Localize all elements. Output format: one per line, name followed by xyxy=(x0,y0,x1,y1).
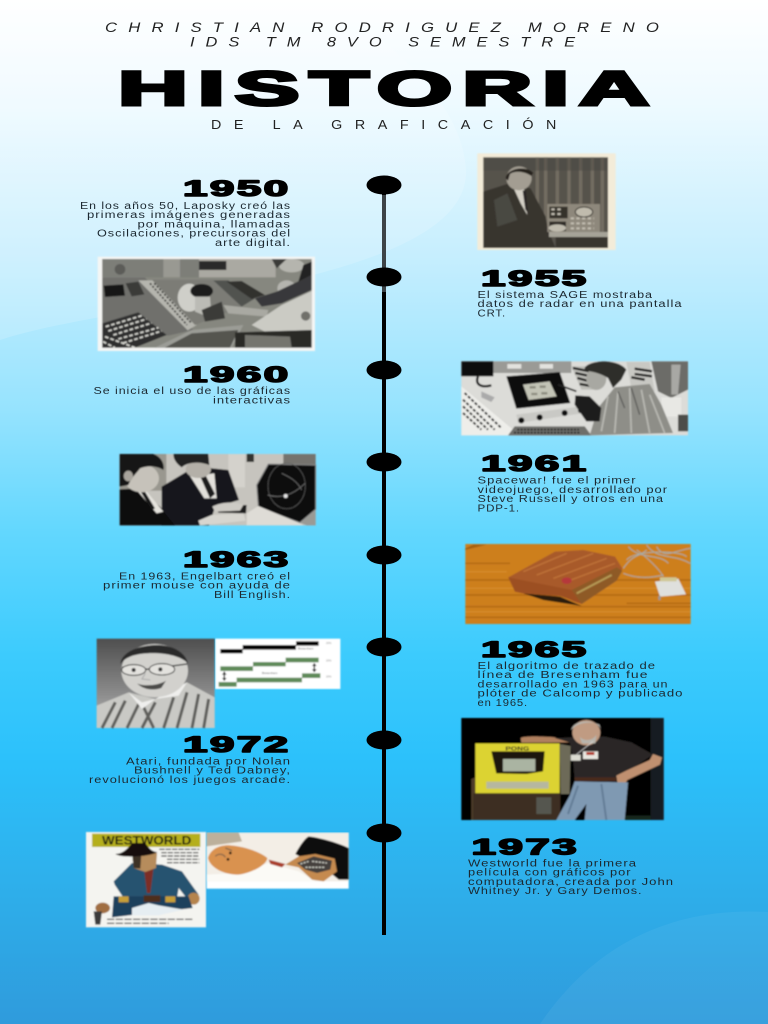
entry: 1972: revolucionó los juegos arcade. xyxy=(89,775,291,786)
entry: 1972 xyxy=(89,732,291,786)
entry: 1963: En 1963, Engelbart creó el xyxy=(119,572,291,582)
subtitle: DE LA GRAFICACIÓN xyxy=(211,117,569,132)
entry: 1973: 1973 xyxy=(472,834,579,860)
entry: 1961: videojuego, desarrollado por xyxy=(478,485,668,496)
entry: 1961: Spacewar! fue el primer xyxy=(478,476,636,486)
entry: 1955 xyxy=(478,266,682,320)
entry: 1963: 1963 xyxy=(183,547,290,572)
author header xyxy=(105,20,670,50)
photo: Sketchpad operator xyxy=(460,360,689,436)
entry: 1965: en 1965. xyxy=(478,698,528,709)
entry: 1950: 1950 xyxy=(183,176,290,201)
chart: Bresenham line steps: 20% xyxy=(326,674,332,678)
entry: 1973: Westworld fue la primera xyxy=(468,858,637,870)
photo: Westworld poster: WESTWORLD xyxy=(102,834,192,848)
background wave: top light shape xyxy=(0,0,466,340)
photo: Westworld android xyxy=(206,832,350,890)
entry: 1960: 1960 xyxy=(183,362,290,387)
entry: 1961 xyxy=(478,451,668,514)
entry: 1973: Whitney Jr. y Gary Demos. xyxy=(468,886,642,897)
chart: Bresenham line steps: Bresenham xyxy=(298,646,314,650)
entry: 1963: Bill English. xyxy=(214,590,291,601)
entry: 1960: Se inicia el uso de las gráficas xyxy=(94,386,291,397)
entry: 1961: 1961 xyxy=(481,451,588,476)
entry: 1955: CRT. xyxy=(478,308,506,320)
entry: 1961: PDP-1. xyxy=(478,504,520,514)
entry: 1950: por máquina, llamadas xyxy=(138,220,291,230)
entry: 1972: 1972 xyxy=(183,732,290,757)
entry: 1961: Steve Russell y otros en una xyxy=(478,494,664,505)
entry: 1950: En los años 50, Laposky creó las xyxy=(80,201,291,212)
author header: IDS TM 8VO SEMESTRE xyxy=(190,34,586,50)
timeline dots xyxy=(366,176,402,842)
entry: 1972: Atari, fundada por Nolan xyxy=(126,756,291,768)
chart: Bresenham line steps: 20% xyxy=(326,641,332,645)
entry: 1950: Oscilaciones, precursoras del xyxy=(97,228,291,240)
photo: Westworld poster xyxy=(85,831,207,928)
background wave: bottom light shape xyxy=(540,911,768,1024)
photo: first mouse xyxy=(464,542,692,626)
entry: 1950: primeras imágenes generadas xyxy=(87,210,291,221)
author header: CHRISTIAN RODRIGUEZ MORENO xyxy=(105,20,670,35)
chart: Bresenham line steps xyxy=(215,638,342,690)
timeline axis xyxy=(366,176,402,935)
entry: 1965: 1965 xyxy=(481,637,588,662)
entry: 1965 xyxy=(478,637,684,709)
title: HISTORIA xyxy=(118,63,659,116)
entry: 1963 xyxy=(103,547,291,601)
entry: 1973: computadora, creada por John xyxy=(468,877,674,888)
photo: Pong cabinet and Bushnell: PONG xyxy=(505,746,529,752)
entry: 1963: primer mouse con ayuda de xyxy=(103,580,291,592)
entry: 1950 xyxy=(80,176,291,249)
entry: 1965: línea de Bresenham fue xyxy=(478,670,648,681)
entry: 1955: 1955 xyxy=(481,266,588,291)
chart: Bresenham line steps: 20% xyxy=(326,658,332,662)
entry: 1973 xyxy=(468,834,674,897)
photo: SAGE console xyxy=(96,256,316,352)
entry: 1965: plóter de Calcomp y publicado xyxy=(478,688,684,700)
entry: 1972: Bushnell y Ted Dabney, xyxy=(134,766,291,776)
photo: Spacewar players xyxy=(118,452,317,527)
entry: 1960: interactivas xyxy=(213,396,291,406)
entry: 1955: datos de radar en una pantalla xyxy=(478,299,682,310)
entry: 1973: película con gráficos por xyxy=(468,868,632,878)
photo: Pong cabinet and Bushnell xyxy=(460,716,665,822)
entry: 1965: desarrollado en 1963 para un xyxy=(478,680,668,690)
photo: Bresenham portrait xyxy=(96,638,216,730)
chart: Bresenham line steps: Bresenham xyxy=(262,671,278,675)
photo: Laposky with oscilloscope xyxy=(476,152,616,250)
entry: 1955: El sistema SAGE mostraba xyxy=(478,290,653,301)
entry: 1965: El algoritmo de trazado de xyxy=(478,661,656,672)
entry: 1950: arte digital. xyxy=(215,238,291,249)
entry: 1960 xyxy=(94,362,291,406)
